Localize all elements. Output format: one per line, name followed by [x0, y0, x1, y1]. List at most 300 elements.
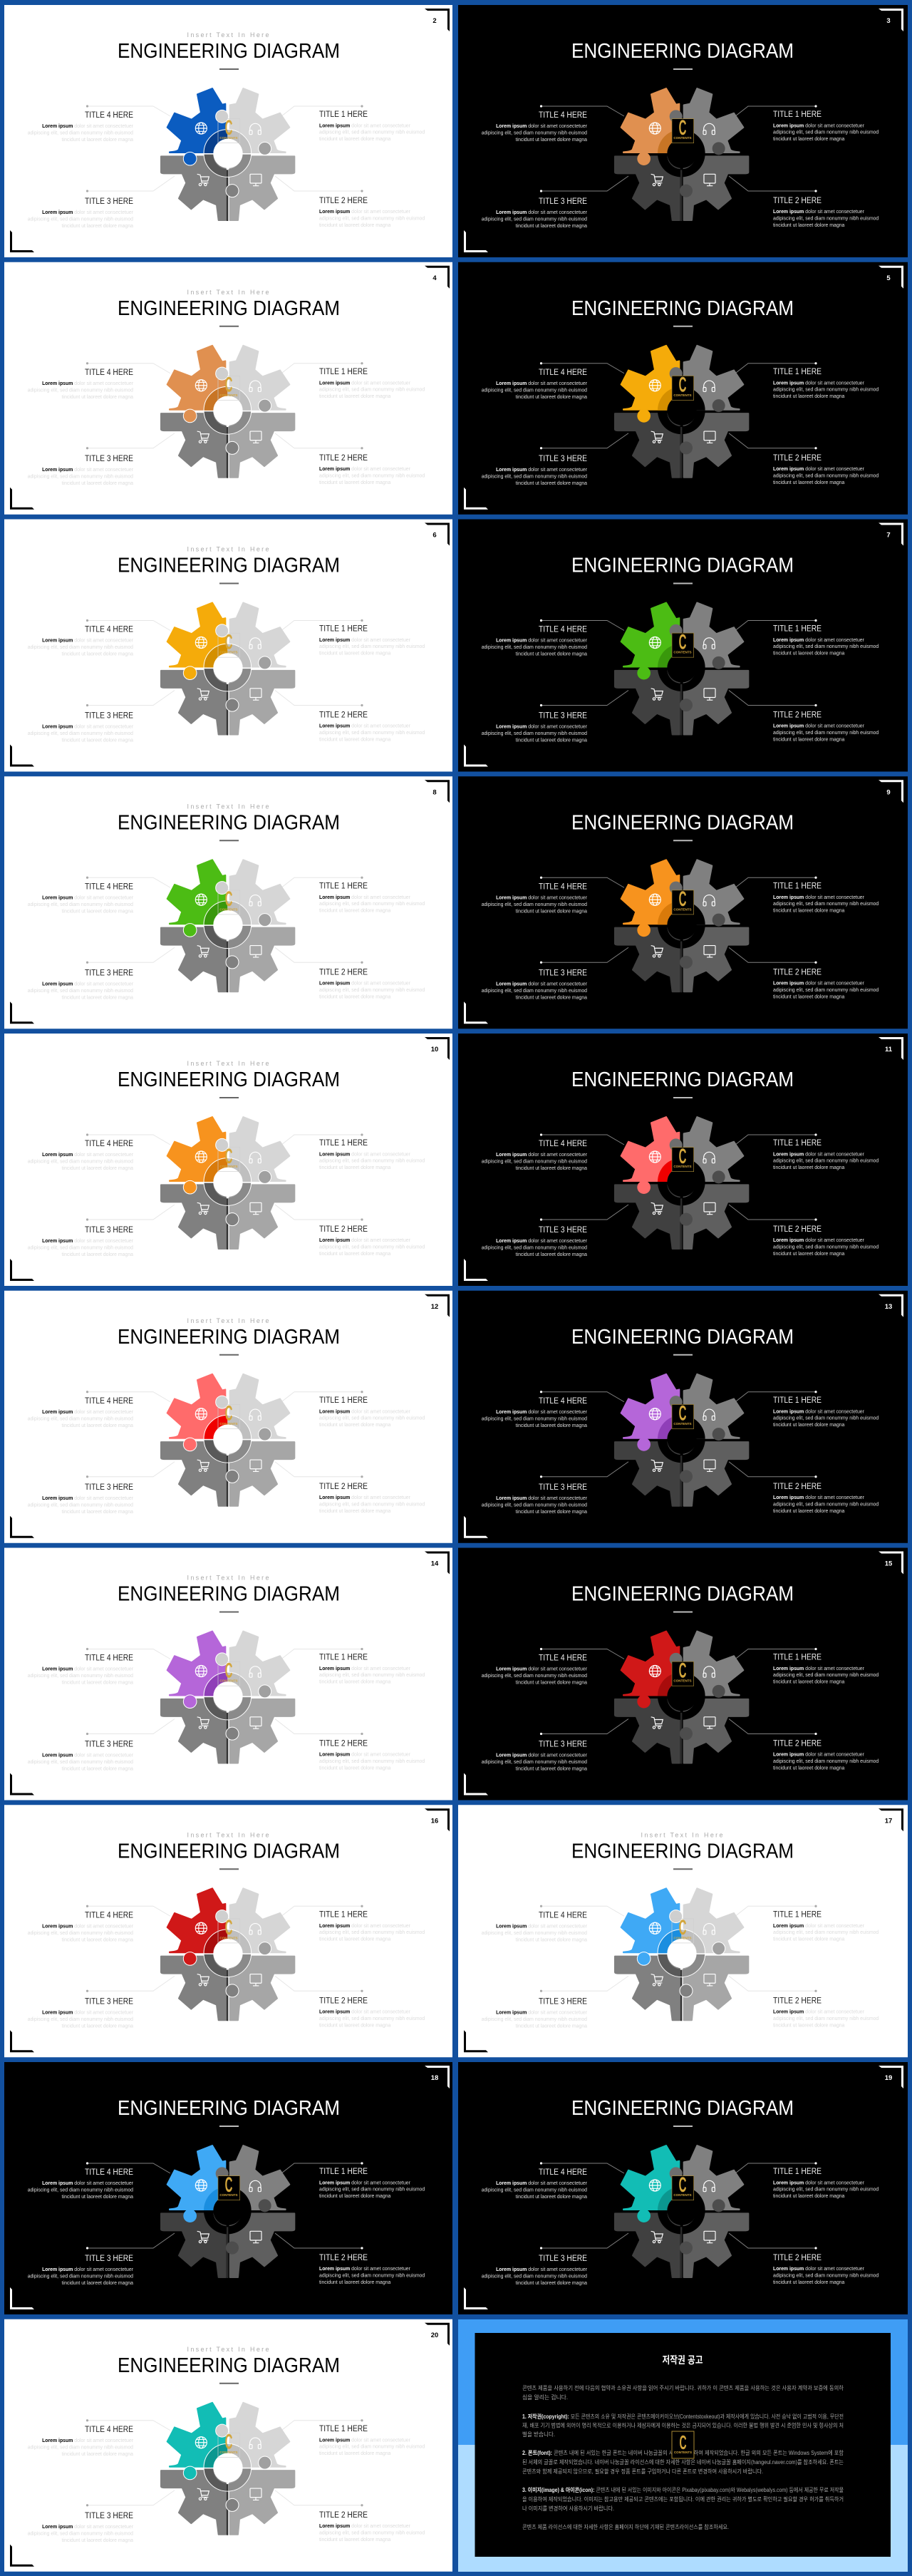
logo: CONTENTS	[219, 393, 238, 397]
text block: title 3	[482, 455, 588, 486]
text block: title 3: Lorem ipsum dolor sit amet consectetuer	[496, 468, 588, 473]
text block: title 3: TITLE 3 HERE	[539, 711, 587, 720]
text block: title 2: tincidunt ut laoreet dolore magna	[773, 2023, 845, 2028]
text block: title 1: Lorem ipsum dolor sit amet consectetuer	[773, 1152, 865, 1158]
text block: title 3: tincidunt ut laoreet dolore magna	[62, 481, 133, 486]
logo: C	[225, 2174, 232, 2198]
text block: title 2: TITLE 2 HERE	[319, 1739, 368, 1748]
text block: title 4: adipiscing elit, sed diam nonummy nibh euismod	[482, 1931, 587, 1936]
text block: title 4	[28, 1140, 134, 1171]
text block: title 2: Lorem ipsum dolor sit amet consectetuer	[319, 1752, 411, 1758]
text block: title 1: Lorem ipsum dolor sit amet consectetuer	[773, 1666, 865, 1671]
text block: title 4: adipiscing elit, sed diam nonummy nibh euismod	[28, 2445, 133, 2450]
text block: title 1: TITLE 1 HERE	[319, 1910, 368, 1919]
text block: title 2: tincidunt ut laoreet dolore magna	[773, 1252, 845, 1257]
text block: title 4	[482, 1140, 588, 1171]
text block: title 2: TITLE 2 HERE	[773, 197, 822, 205]
logo: CONTENTS	[219, 1936, 238, 1939]
text block: title 2: TITLE 2 HERE	[319, 454, 368, 463]
text block: title 1: adipiscing elit, sed diam nonummy nibh euismod	[319, 1673, 425, 1678]
text block: title 1: tincidunt ut laoreet dolore magna	[773, 1937, 845, 1942]
text block: title 1: TITLE 1 HERE	[773, 2168, 822, 2176]
text block: title 2: tincidunt ut laoreet dolore magna	[773, 994, 845, 999]
subtitle: Insert Text In Here	[187, 1060, 269, 1067]
text block: title 4: Lorem ipsum dolor sit amet consectetuer	[496, 1666, 588, 1672]
text block: title 3	[28, 2512, 134, 2543]
copyright heading: 저작권 공고	[663, 2354, 703, 2366]
text block: title 3	[28, 1741, 134, 1772]
copyright section 2	[522, 2449, 844, 2475]
text block: title 4: tincidunt ut laoreet dolore magna	[62, 138, 133, 143]
text block: title 4: adipiscing elit, sed diam nonummy nibh euismod	[28, 1674, 133, 1679]
text block: title 3: TITLE 3 HERE	[85, 2512, 133, 2520]
text block: title 2	[319, 2511, 425, 2542]
corner marks and rule	[10, 523, 450, 767]
text block: title 4: tincidunt ut laoreet dolore magna	[62, 1423, 133, 1428]
copyright section 3: 나 이미지를 변경하여 사용하시기 바랍니다.	[522, 2505, 614, 2512]
gear diagram	[161, 1631, 294, 1763]
logo: CONTENTS	[673, 1422, 692, 1426]
logo: C	[225, 1917, 232, 1940]
text block: title 3: adipiscing elit, sed diam nonummy nibh euismod	[482, 2017, 587, 2022]
text block: title 1: adipiscing elit, sed diam nonummy nibh euismod	[773, 644, 879, 649]
text block: title 1: tincidunt ut laoreet dolore magna	[319, 1679, 391, 1685]
text block: title 4: TITLE 4 HERE	[539, 1140, 587, 1148]
text block: title 2: tincidunt ut laoreet dolore magna	[319, 1766, 391, 1771]
text block: title 2	[773, 1483, 879, 1514]
text block: title 3: Lorem ipsum dolor sit amet consectetuer	[496, 724, 588, 730]
text block: title 1: Lorem ipsum dolor sit amet consectetuer	[773, 895, 865, 900]
text block: title 4: adipiscing elit, sed diam nonummy nibh euismod	[28, 1159, 133, 1165]
gear diagram	[615, 860, 748, 992]
text block: title 2: Lorem ipsum dolor sit amet consectetuer	[773, 1238, 865, 1243]
page number: 20	[431, 2332, 438, 2339]
text block: title 1: adipiscing elit, sed diam nonummy nibh euismod	[773, 387, 879, 392]
subtitle: Insert Text In Here	[187, 803, 269, 810]
heading: ENGINEERING DIAGRAM	[118, 1582, 340, 1605]
text block: title 4	[482, 1654, 588, 1685]
leader lines	[540, 2162, 817, 2250]
panel: slide 7	[458, 519, 908, 771]
text block: title 4: tincidunt ut laoreet dolore magna	[516, 1166, 587, 1171]
logo: CONTENTS	[673, 1936, 692, 1939]
text block: title 1: Lorem ipsum dolor sit amet consectetuer	[319, 1409, 411, 1414]
text block: title 1: adipiscing elit, sed diam nonummy nibh euismod	[319, 2444, 425, 2449]
text block: title 1	[319, 1396, 425, 1428]
text block: title 1: adipiscing elit, sed diam nonummy nibh euismod	[319, 1416, 425, 1421]
text block: title 3	[28, 197, 134, 229]
corner marks and rule	[464, 523, 903, 767]
gear diagram	[615, 346, 748, 478]
text block: title 2: adipiscing elit, sed diam nonummy nibh euismod	[773, 2274, 879, 2278]
text block: title 4: TITLE 4 HERE	[539, 882, 587, 891]
text block: title 4	[28, 369, 134, 400]
text block: title 4	[482, 369, 588, 400]
logo: C	[679, 1402, 686, 1426]
text block: title 1: adipiscing elit, sed diam nonummy nibh euismod	[773, 1416, 879, 1421]
text block: title 3: adipiscing elit, sed diam nonummy nibh euismod	[482, 217, 587, 222]
text block: title 3: adipiscing elit, sed diam nonummy nibh euismod	[482, 1503, 587, 1508]
text block: title 1: TITLE 1 HERE	[319, 882, 368, 890]
heading: ENGINEERING DIAGRAM	[571, 1068, 794, 1091]
text block: title 2: tincidunt ut laoreet dolore magna	[319, 2280, 391, 2285]
text block: title 1: tincidunt ut laoreet dolore magna	[773, 908, 845, 913]
heading: ENGINEERING DIAGRAM	[571, 297, 794, 320]
text block: title 2: Lorem ipsum dolor sit amet consectetuer	[773, 1495, 865, 1500]
corner marks and rule	[10, 1037, 450, 1281]
text block: title 2: TITLE 2 HERE	[319, 1997, 368, 2005]
text block: title 4: Lorem ipsum dolor sit amet consectetuer	[42, 1924, 134, 1929]
text block: title 2	[773, 1739, 879, 1771]
text block: title 1	[319, 1654, 425, 1685]
leader lines	[86, 1391, 363, 1478]
text block: title 1: TITLE 1 HERE	[319, 368, 368, 376]
logo	[673, 1917, 692, 1940]
heading: ENGINEERING DIAGRAM	[571, 2097, 794, 2120]
text block: title 4: adipiscing elit, sed diam nonummy nibh euismod	[482, 388, 587, 393]
text block: title 4	[28, 1654, 134, 1685]
text block: title 2: tincidunt ut laoreet dolore magna	[319, 737, 391, 743]
text block: title 4: TITLE 4 HERE	[539, 1397, 587, 1406]
text block: title 1: Lorem ipsum dolor sit amet consectetuer	[773, 2181, 865, 2185]
leader lines	[540, 105, 817, 192]
text block: title 2: Lorem ipsum dolor sit amet consectetuer	[319, 467, 411, 472]
text block: title 1	[773, 1654, 879, 1685]
text block: title 3: tincidunt ut laoreet dolore magna	[516, 481, 587, 486]
gear diagram	[161, 602, 294, 735]
panel: slide 16	[4, 1805, 452, 2057]
logo	[673, 373, 692, 397]
page number: 4	[432, 274, 437, 282]
text block: title 4: TITLE 4 HERE	[85, 2168, 133, 2177]
text block: title 2: Lorem ipsum dolor sit amet consectetuer	[319, 981, 411, 986]
panel: slide 11	[458, 1034, 908, 1286]
text block: title 1: Lorem ipsum dolor sit amet consectetuer	[319, 2438, 411, 2443]
text block: title 4: TITLE 4 HERE	[85, 626, 133, 634]
text block: title 1	[773, 110, 879, 142]
text block: title 1	[773, 368, 879, 399]
heading: ENGINEERING DIAGRAM	[118, 811, 340, 834]
text block: title 4: adipiscing elit, sed diam nonummy nibh euismod	[482, 1674, 587, 1679]
text block: title 2: adipiscing elit, sed diam nonummy nibh euismod	[319, 988, 425, 993]
text block: title 4: tincidunt ut laoreet dolore magna	[516, 2195, 587, 2200]
text block: title 4: Lorem ipsum dolor sit amet consectetuer	[42, 639, 134, 643]
corner marks and rule	[464, 266, 903, 510]
panel: slide 9	[458, 776, 908, 1029]
leader lines	[86, 362, 363, 449]
text block: title 3: TITLE 3 HERE	[85, 969, 133, 977]
page number: 9	[886, 788, 891, 796]
text block: title 4: TITLE 4 HERE	[539, 626, 587, 634]
text block: title 3: Lorem ipsum dolor sit amet consectetuer	[42, 2267, 134, 2272]
page number: 5	[886, 274, 891, 282]
text block: title 3: tincidunt ut laoreet dolore magna	[62, 1510, 133, 1515]
leader lines	[540, 619, 817, 706]
copyright intro	[522, 2384, 844, 2401]
text block: title 2	[773, 968, 879, 999]
text block: title 2: adipiscing elit, sed diam nonummy nibh euismod	[319, 1245, 425, 1250]
text block: title 4: adipiscing elit, sed diam nonummy nibh euismod	[28, 645, 133, 650]
text block: title 3: tincidunt ut laoreet dolore magna	[516, 738, 587, 743]
heading: ENGINEERING DIAGRAM	[118, 40, 340, 63]
logo: C	[225, 888, 232, 912]
text block: title 3: tincidunt ut laoreet dolore magna	[516, 2281, 587, 2286]
text block: title 3	[482, 1226, 588, 1257]
text block: title 3	[28, 711, 134, 743]
text block: title 4	[28, 882, 134, 914]
text block: title 2: adipiscing elit, sed diam nonummy nibh euismod	[773, 731, 879, 736]
text block: title 2: tincidunt ut laoreet dolore magna	[319, 1509, 391, 1514]
text block: title 3: tincidunt ut laoreet dolore magna	[62, 224, 133, 229]
text block: title 1: tincidunt ut laoreet dolore magna	[319, 1937, 391, 1942]
text block: title 1: tincidunt ut laoreet dolore magna	[319, 394, 391, 399]
text block: title 4: tincidunt ut laoreet dolore magna	[516, 651, 587, 657]
text block: title 1	[773, 882, 879, 913]
text block: title 2: TITLE 2 HERE	[319, 197, 368, 205]
text block: title 1	[773, 1396, 879, 1428]
leader lines	[86, 2419, 363, 2506]
text block: title 1: TITLE 1 HERE	[319, 1139, 368, 1148]
logo: CONTENTS	[673, 907, 692, 911]
logo: CONTENTS	[219, 2451, 238, 2454]
text block: title 3: tincidunt ut laoreet dolore magna	[62, 738, 133, 743]
text block: title 2: adipiscing elit, sed diam nonummy nibh euismod	[773, 1245, 879, 1250]
text block: title 4: Lorem ipsum dolor sit amet consectetuer	[496, 381, 588, 386]
text block: title 2: adipiscing elit, sed diam nonummy nibh euismod	[319, 217, 425, 221]
logo: CONTENTS	[219, 136, 238, 140]
text block: title 1: adipiscing elit, sed diam nonummy nibh euismod	[319, 2187, 425, 2193]
text block: title 4: tincidunt ut laoreet dolore magna	[516, 138, 587, 143]
panel: slide 5	[458, 262, 908, 515]
corner marks and rule	[10, 2323, 450, 2567]
text block: title 4: Lorem ipsum dolor sit amet consectetuer	[496, 1924, 588, 1929]
gear diagram	[161, 346, 294, 478]
text block: title 3	[482, 969, 588, 1000]
leader lines	[540, 362, 817, 449]
gear diagram	[161, 1117, 294, 1250]
logo: C	[225, 1145, 232, 1169]
text block: title 4: Lorem ipsum dolor sit amet consectetuer	[42, 1666, 134, 1672]
logo: C	[679, 1659, 686, 1683]
logo: CONTENTS	[219, 1422, 238, 1426]
text block: title 3: adipiscing elit, sed diam nonummy nibh euismod	[28, 1760, 133, 1765]
text block: title 4: adipiscing elit, sed diam nonummy nibh euismod	[482, 645, 587, 650]
page number: 14	[431, 1560, 439, 1568]
text block: title 2: tincidunt ut laoreet dolore magna	[319, 2023, 391, 2028]
leader lines	[86, 1133, 363, 1221]
text block: title 3: Lorem ipsum dolor sit amet consectetuer	[42, 1496, 134, 1501]
text block: title 3: Lorem ipsum dolor sit amet consectetuer	[42, 982, 134, 986]
panel: slide 14	[4, 1548, 452, 1800]
text block: title 2	[319, 968, 425, 999]
page number: 6	[432, 532, 437, 539]
logo	[219, 888, 238, 912]
gear diagram	[161, 1374, 294, 1507]
text block: title 2	[773, 454, 879, 485]
text block: title 2: Lorem ipsum dolor sit amet consectetuer	[773, 981, 865, 986]
logo	[219, 2431, 238, 2454]
text block: title 3: Lorem ipsum dolor sit amet consectetuer	[42, 1239, 134, 1244]
text block: title 3: tincidunt ut laoreet dolore magna	[516, 224, 587, 229]
corner marks and rule	[464, 1551, 903, 1795]
text block: title 1: TITLE 1 HERE	[773, 882, 822, 890]
gear diagram	[161, 2145, 294, 2278]
text block: title 4: tincidunt ut laoreet dolore magna	[62, 909, 133, 914]
text block: title 4: TITLE 4 HERE	[85, 369, 133, 377]
text block: title 1: adipiscing elit, sed diam nonummy nibh euismod	[319, 644, 425, 649]
text block: title 2	[773, 1225, 879, 1257]
text block: title 1: Lorem ipsum dolor sit amet consectetuer	[319, 1924, 411, 1929]
logo	[219, 117, 238, 140]
text block: title 2: tincidunt ut laoreet dolore magna	[773, 737, 845, 743]
text block: title 1: TITLE 1 HERE	[773, 110, 822, 119]
page number: 3	[886, 17, 891, 25]
text block: title 2	[773, 197, 879, 228]
text block: title 2: adipiscing elit, sed diam nonummy nibh euismod	[319, 2016, 425, 2021]
logo: C	[225, 1402, 232, 1426]
text block: title 1: Lorem ipsum dolor sit amet consectetuer	[319, 124, 411, 128]
text block: title 2: Lorem ipsum dolor sit amet consectetuer	[773, 2267, 865, 2272]
gear diagram	[615, 1117, 748, 1250]
panel: slide 18	[4, 2062, 452, 2314]
text block: title 4: adipiscing elit, sed diam nonummy nibh euismod	[28, 131, 133, 135]
copyright section 1: 1. 저작권(copyright): 모든 콘텐츠의 소유 및 저작권은 콘텐츠메이커이오브(Contentstoxkeout)과 제작사에게 있습니다. 사전 승낙 없이 고범적 이용, 무단전	[522, 2413, 844, 2420]
text block: title 2: adipiscing elit, sed diam nonummy nibh euismod	[319, 2274, 425, 2278]
text block: title 3: Lorem ipsum dolor sit amet consectetuer	[42, 2525, 134, 2530]
text block: title 3: Lorem ipsum dolor sit amet consectetuer	[496, 2010, 588, 2015]
heading: ENGINEERING DIAGRAM	[571, 1582, 794, 1605]
text block: title 2: adipiscing elit, sed diam nonummy nibh euismod	[773, 217, 879, 221]
text block: title 3	[28, 1483, 134, 1515]
text block: title 3	[482, 197, 588, 229]
text block: title 2: TITLE 2 HERE	[319, 968, 368, 977]
logo	[219, 1917, 238, 1940]
text block: title 2: TITLE 2 HERE	[773, 1997, 822, 2005]
logo: C	[225, 2431, 232, 2454]
text block: title 2: Lorem ipsum dolor sit amet consectetuer	[319, 2524, 411, 2529]
text block: title 3	[482, 2255, 588, 2286]
text block: title 2: Lorem ipsum dolor sit amet consectetuer	[319, 210, 411, 215]
corner marks and rule	[464, 1037, 903, 1281]
text block: title 3: adipiscing elit, sed diam nonummy nibh euismod	[28, 474, 133, 479]
text block: title 2: adipiscing elit, sed diam nonummy nibh euismod	[319, 473, 425, 478]
panel: slide 2	[4, 5, 452, 257]
logo	[219, 2174, 238, 2198]
text block: title 3	[28, 969, 134, 1000]
text block: title 2: adipiscing elit, sed diam nonummy nibh euismod	[319, 1759, 425, 1764]
text block: title 1: TITLE 1 HERE	[773, 1654, 822, 1662]
text block: title 3: TITLE 3 HERE	[539, 1997, 587, 2006]
text block: title 1: Lorem ipsum dolor sit amet consectetuer	[319, 638, 411, 643]
gear diagram	[161, 1888, 294, 2021]
text block: title 1: Lorem ipsum dolor sit amet consectetuer	[319, 895, 411, 900]
leader lines	[540, 877, 817, 964]
text block: title 4: TITLE 4 HERE	[85, 1654, 133, 1662]
logo	[219, 373, 238, 397]
text block: title 3: TITLE 3 HERE	[85, 711, 133, 720]
copyright intro: 콘텐츠 제품을 사용하기 전에 다음의 협약과 소유권 사항을 읽어 주시기 바랍니다. 귀하가 이 콘텐츠 제품을 사용하는 것은 사용자 계약과 보증에 동의하	[522, 2384, 844, 2391]
copyright section 1: 재, 배포 기기 범법에 외어이 영리 목적으로 이용하거나 제삼자에게 이용하는 것은 금지되어 있습니다. 이러한 불법 행위 발견 시 준엄한 민사 및 형사상의 처	[522, 2422, 844, 2429]
leader lines	[540, 1648, 817, 1735]
text block: title 1: tincidunt ut laoreet dolore magna	[319, 651, 391, 656]
text block: title 1: adipiscing elit, sed diam nonummy nibh euismod	[319, 387, 425, 392]
subtitle: Insert Text In Here	[187, 546, 269, 553]
text block: title 4: tincidunt ut laoreet dolore magna	[62, 2195, 133, 2200]
text block: title 3: adipiscing elit, sed diam nonummy nibh euismod	[482, 2274, 587, 2279]
text block: title 3: TITLE 3 HERE	[539, 2255, 587, 2263]
heading: ENGINEERING DIAGRAM	[118, 1326, 340, 1349]
copyright section 1: 벌을 받습니다.	[522, 2431, 555, 2438]
text block: title 4: tincidunt ut laoreet dolore magna	[62, 1681, 133, 1685]
corner marks and rule	[10, 780, 450, 1024]
text block: title 4: adipiscing elit, sed diam nonummy nibh euismod	[28, 1931, 133, 1936]
text block: title 1: TITLE 1 HERE	[773, 1396, 822, 1405]
page number: 11	[885, 1046, 893, 1053]
text block: title 1: Lorem ipsum dolor sit amet consectetuer	[773, 381, 865, 386]
text block: title 3: adipiscing elit, sed diam nonummy nibh euismod	[28, 1503, 133, 1508]
text block: title 1: TITLE 1 HERE	[319, 110, 368, 119]
text block: title 1: TITLE 1 HERE	[773, 368, 822, 376]
text block: title 3	[28, 1997, 134, 2029]
logo: CONTENTS	[673, 393, 692, 397]
text block: title 3: Lorem ipsum dolor sit amet consectetuer	[496, 1239, 588, 1244]
text block: title 1: adipiscing elit, sed diam nonummy nibh euismod	[773, 130, 879, 135]
copyright section 2: 2. 폰트(font): 콘텐츠 내에 된 서있는 한글 폰트는 네이버 나눔글꼴의 서체를 사용하여 제작되었습니다. 한글 외의 모든 폰트는 Windows System에 포함	[522, 2449, 844, 2456]
corner marks and rule	[464, 780, 903, 1024]
text block: title 4: adipiscing elit, sed diam nonummy nibh euismod	[28, 1416, 133, 1421]
heading: ENGINEERING DIAGRAM	[571, 555, 794, 577]
text block: title 4: tincidunt ut laoreet dolore magna	[62, 1166, 133, 1171]
text block: title 4: adipiscing elit, sed diam nonummy nibh euismod	[482, 902, 587, 907]
panel: slide 19	[458, 2062, 908, 2314]
text block: title 2: Lorem ipsum dolor sit amet consectetuer	[319, 724, 411, 728]
leader lines	[540, 1391, 817, 1478]
text block: title 1	[319, 368, 425, 399]
text block: title 4: TITLE 4 HERE	[539, 111, 587, 120]
text block: title 1: TITLE 1 HERE	[319, 2168, 368, 2176]
text block: title 2	[319, 1739, 425, 1771]
text block: title 3: TITLE 3 HERE	[85, 1226, 133, 1235]
text block: title 2: tincidunt ut laoreet dolore magna	[773, 1766, 845, 1771]
subtitle: Insert Text In Here	[187, 1574, 269, 1581]
text block: title 2: TITLE 2 HERE	[319, 1483, 368, 1491]
panel: slide 10	[4, 1034, 452, 1286]
text block: title 2: adipiscing elit, sed diam nonummy nibh euismod	[773, 988, 879, 993]
text block: title 2	[319, 2254, 425, 2285]
text block: title 2: adipiscing elit, sed diam nonummy nibh euismod	[319, 1502, 425, 1507]
text block: title 4	[28, 2168, 134, 2200]
heading: ENGINEERING DIAGRAM	[118, 2097, 340, 2120]
logo: CONTENTS	[673, 1679, 692, 1682]
text block: title 2: Lorem ipsum dolor sit amet consectetuer	[319, 2267, 411, 2272]
panel: slide 8	[4, 776, 452, 1029]
corner marks and rule	[10, 1551, 450, 1795]
text block: title 4: TITLE 4 HERE	[85, 111, 133, 120]
text block: title 2: TITLE 2 HERE	[773, 1739, 822, 1748]
heading: ENGINEERING DIAGRAM	[571, 1326, 794, 1349]
text block: title 2: adipiscing elit, sed diam nonummy nibh euismod	[773, 473, 879, 478]
text block: title 1: adipiscing elit, sed diam nonummy nibh euismod	[773, 1930, 879, 1935]
gear diagram	[161, 860, 294, 992]
text block: title 3: TITLE 3 HERE	[85, 1483, 133, 1492]
text block: title 1: Lorem ipsum dolor sit amet consectetuer	[319, 381, 411, 386]
subtitle: Insert Text In Here	[187, 289, 269, 296]
logo: C	[679, 1917, 686, 1940]
text block: title 2: TITLE 2 HERE	[319, 711, 368, 720]
gear diagram	[615, 2145, 748, 2278]
logo: CONTENTS	[219, 2193, 238, 2197]
corner marks and rule	[464, 1808, 903, 2052]
